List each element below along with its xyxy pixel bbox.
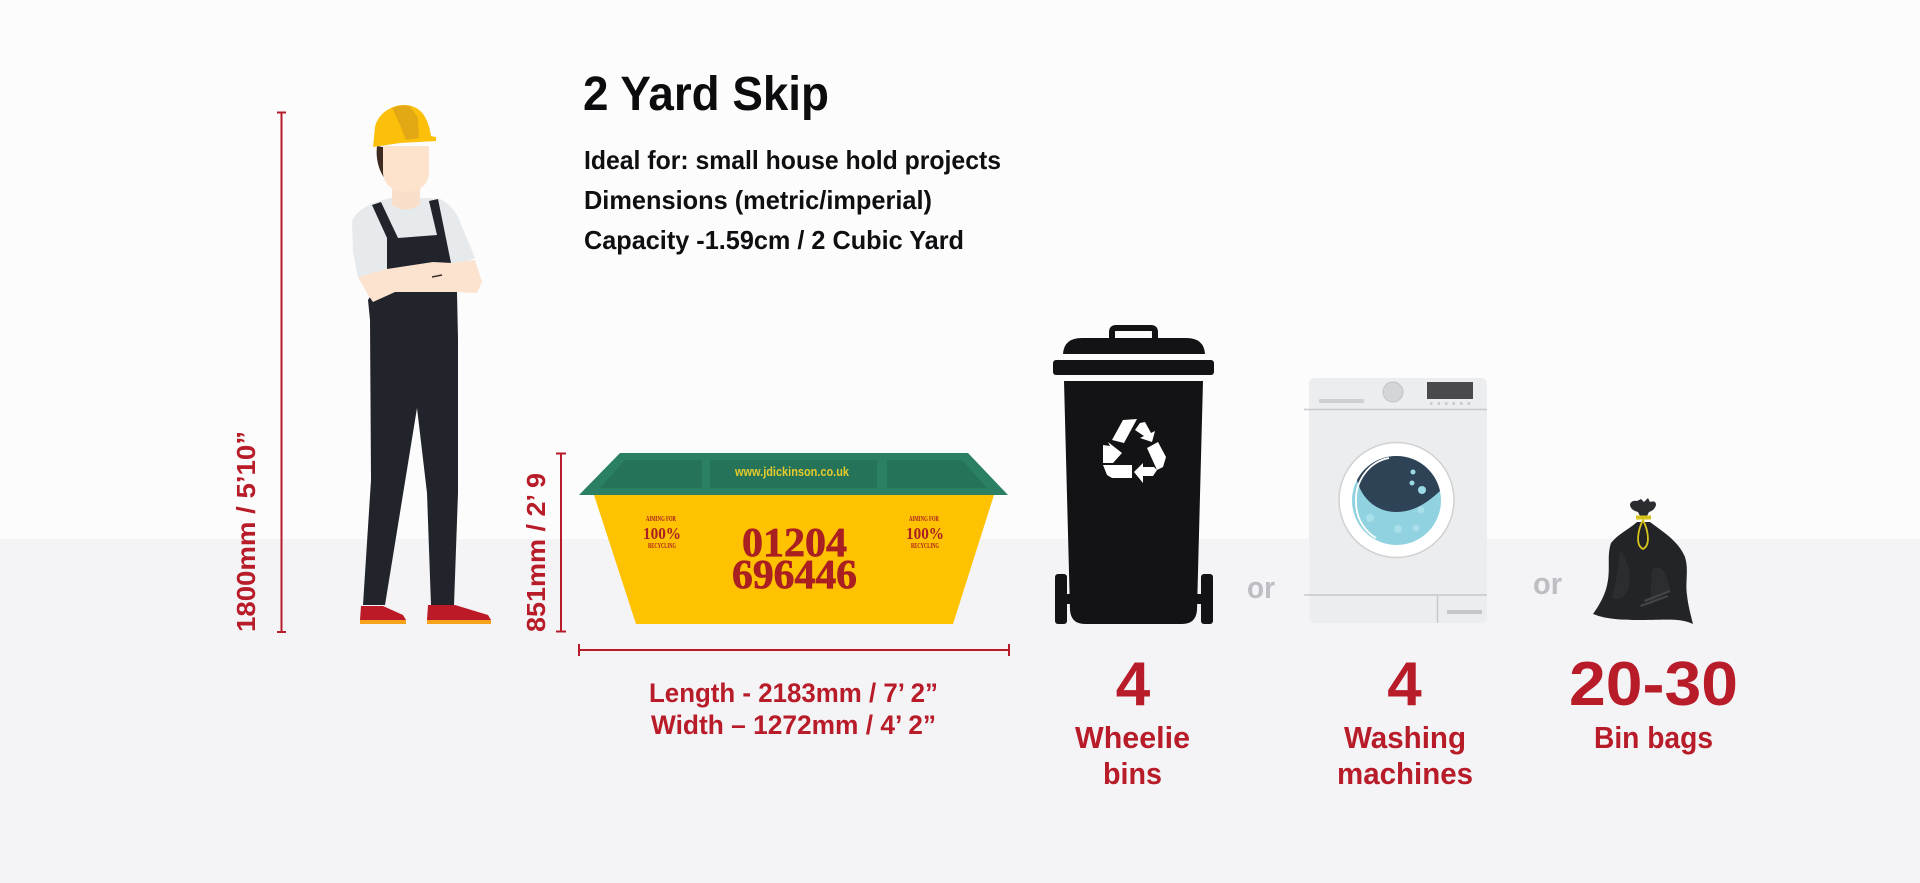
height measure: person: [231, 112, 286, 632]
washing machine count: machines: [1337, 756, 1473, 791]
skip rim: [579, 453, 1008, 495]
buttons: [1430, 402, 1472, 405]
bin handle: [1112, 328, 1155, 340]
face: [383, 146, 429, 192]
bin lid: [1063, 338, 1205, 354]
wheelie bin count: bins: [1103, 756, 1162, 791]
right shoe: [427, 605, 491, 624]
crossed arms: [358, 260, 482, 302]
wheelie bin count: Wheelie: [1075, 720, 1190, 755]
washing machine count: 4: [1387, 650, 1422, 719]
background floor: [0, 539, 1920, 883]
height measure: skip: 851mm / 2’ 9: [521, 473, 551, 632]
drawer handle: [1319, 399, 1364, 403]
door glass water: [1352, 456, 1441, 545]
bin wheels: [1055, 574, 1213, 624]
plinth handle: [1447, 610, 1482, 614]
arm crease: [432, 275, 442, 277]
"or" separator: or: [1533, 566, 1562, 601]
neck: [392, 180, 420, 210]
icon: wheelie bin: [1053, 328, 1214, 624]
icon: bin bag: [1593, 498, 1693, 624]
yellow tie: [1636, 518, 1651, 549]
glass highlight: [1356, 458, 1389, 538]
height measure: person: 1800mm / 5’10”: [231, 431, 261, 632]
washing machine count: Washing: [1344, 720, 1466, 755]
wheelie bin count: 4: [1116, 650, 1151, 719]
icon: construction worker: [352, 105, 491, 624]
bubbles: [1366, 470, 1426, 533]
dial: [1383, 382, 1403, 402]
wheelie bin count: [1075, 650, 1190, 791]
machine body: [1309, 378, 1487, 623]
shirt: [352, 198, 475, 278]
skip body: [594, 495, 994, 624]
skip details text block: Ideal for: small house hold projects: [584, 145, 1001, 175]
left recycling badge: RECYCLING: [648, 542, 676, 550]
length measure: [579, 644, 1009, 656]
hair: [377, 146, 400, 186]
right recycling badge: [906, 515, 944, 550]
bin body: [1064, 381, 1203, 624]
right recycling badge: RECYCLING: [911, 542, 939, 550]
left recycling badge: 100%: [643, 524, 681, 543]
bin bag count: [1569, 650, 1738, 755]
skip details text block: Dimensions (metric/imperial): [584, 185, 932, 215]
right recycling badge: AIMING FOR: [909, 515, 940, 523]
helmet highlight: [392, 105, 419, 140]
panel dividers: [1304, 410, 1487, 623]
helmet: [373, 105, 436, 147]
bin bag count: 20-30: [1569, 650, 1738, 719]
left shoe: [360, 606, 406, 624]
skip website: www.jdickinson.co.uk: [734, 465, 849, 479]
"or" separator: or: [1247, 570, 1275, 605]
skip details text block: [584, 145, 1001, 255]
icon: skip: [579, 453, 1008, 624]
bag folds: [1612, 550, 1670, 607]
washing machine count: [1337, 650, 1473, 791]
icon: recycling symbol: [1103, 419, 1166, 483]
skip phone number: 696446: [732, 551, 857, 597]
bag body: [1593, 522, 1693, 624]
skip phone number: 01204: [742, 519, 847, 565]
skip phone number: [732, 519, 857, 597]
skip dimensions text: Length - 2183mm / 7’ 2”: [649, 678, 938, 708]
height measure: skip: [521, 454, 566, 632]
overalls: [363, 199, 458, 605]
skip dimensions text: [649, 678, 938, 740]
rim panels: [600, 460, 987, 488]
background wall: [0, 0, 1920, 540]
skip details text block: Capacity -1.59cm / 2 Cubic Yard: [584, 225, 964, 255]
skip dimensions text: Width – 1272mm / 4’ 2”: [651, 710, 936, 740]
display: [1427, 382, 1473, 399]
left recycling badge: AIMING FOR: [646, 515, 677, 523]
title: 2 Yard Skip: [583, 68, 829, 121]
bag knot: [1630, 498, 1656, 516]
door ring: [1339, 442, 1454, 558]
bin rim: [1053, 360, 1214, 375]
icon: washing machine: [1304, 378, 1487, 623]
door glass dark: [1357, 456, 1440, 512]
bin bag count: Bin bags: [1594, 720, 1713, 755]
left recycling badge: [643, 515, 681, 550]
right recycling badge: 100%: [906, 524, 944, 543]
